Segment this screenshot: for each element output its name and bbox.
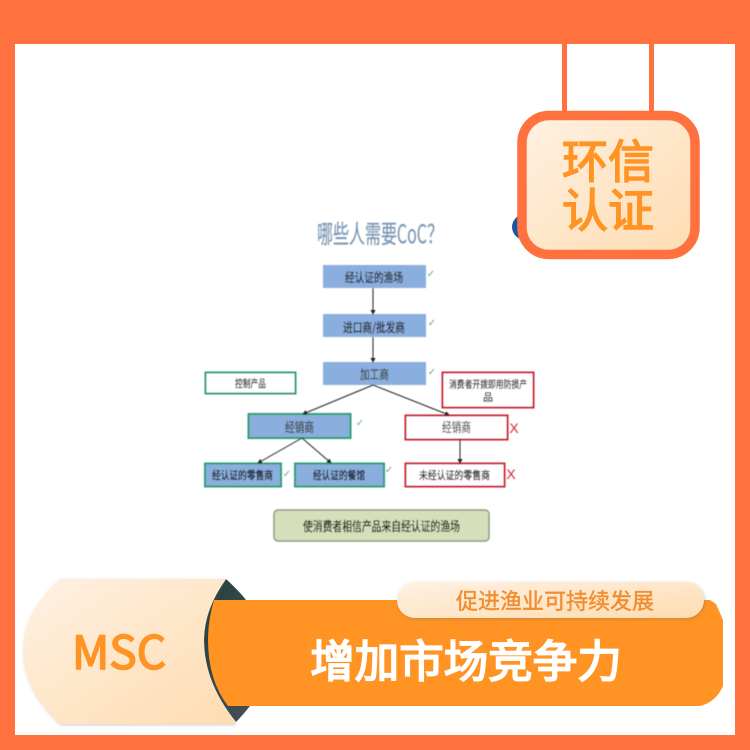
headline text: 增加市场竞争力 [310,625,622,690]
sign board [522,116,695,254]
sign text: 认证 [562,175,654,241]
node: green distributor [248,414,350,438]
check marks [283,269,436,480]
node: certified retailer: 经认证的零售商 [212,467,273,483]
check marks: ✓ [427,269,435,280]
conclusion box [274,510,489,541]
flowchart title: 哪些人需要CoC？ [317,215,443,251]
dark fold behind banner [204,579,250,722]
sign text [562,126,654,241]
check marks: ✓ [283,469,291,480]
flowchart: who needs CoC [205,215,534,541]
node: certified fishery [323,265,426,288]
node: certified retailer [205,464,281,486]
hanging sign [512,44,695,254]
subtitle text: 促进渔业可持续发展 [456,584,654,616]
node: consumer tamper-proof product: 消费者开拨即用防损产 [449,376,527,391]
check marks: ✓ [385,465,393,476]
node: consumer tamper-proof product: 品 [483,389,493,404]
node: processor: 加工商 [360,364,389,383]
cross marks [506,420,519,482]
node: uncertified retailer: 未经认证的零售商 [419,467,490,483]
MSC text: MSC [72,617,166,683]
cross marks: X [506,466,516,482]
flow arrows [258,288,460,463]
node: certified restaurant [295,464,384,486]
node: importer / wholesaler: 进口商/批发商 [343,317,405,336]
check marks: ✓ [356,418,364,429]
subtitle pill [397,582,704,618]
sign text: 环信 [562,126,654,192]
node: red distributor: 经销商 [442,417,471,436]
check marks: ✓ [428,318,436,329]
conclusion box: 使消费者相信产品来自经认证的渔场 [303,516,460,535]
node: consumer tamper-proof product [442,372,534,408]
sign hangers [562,44,654,114]
node: red distributor [406,416,508,440]
MSC label shape [23,579,236,724]
node: certified restaurant: 经认证的餐馆 [313,467,365,483]
orange headline bar [208,600,723,706]
node: uncertified retailer [406,464,504,486]
check marks: ✓ [428,367,436,378]
node: control product [206,372,296,394]
blue logo fragment [512,213,544,241]
node: importer / wholesaler [323,314,426,337]
cross marks: X [509,420,519,436]
node: certified fishery: 经认证的渔场 [345,267,403,286]
node: processor [323,362,426,385]
node: control product: 控制产品 [235,376,266,391]
bottom banner [23,579,723,724]
node: green distributor: 经销商 [285,417,314,436]
